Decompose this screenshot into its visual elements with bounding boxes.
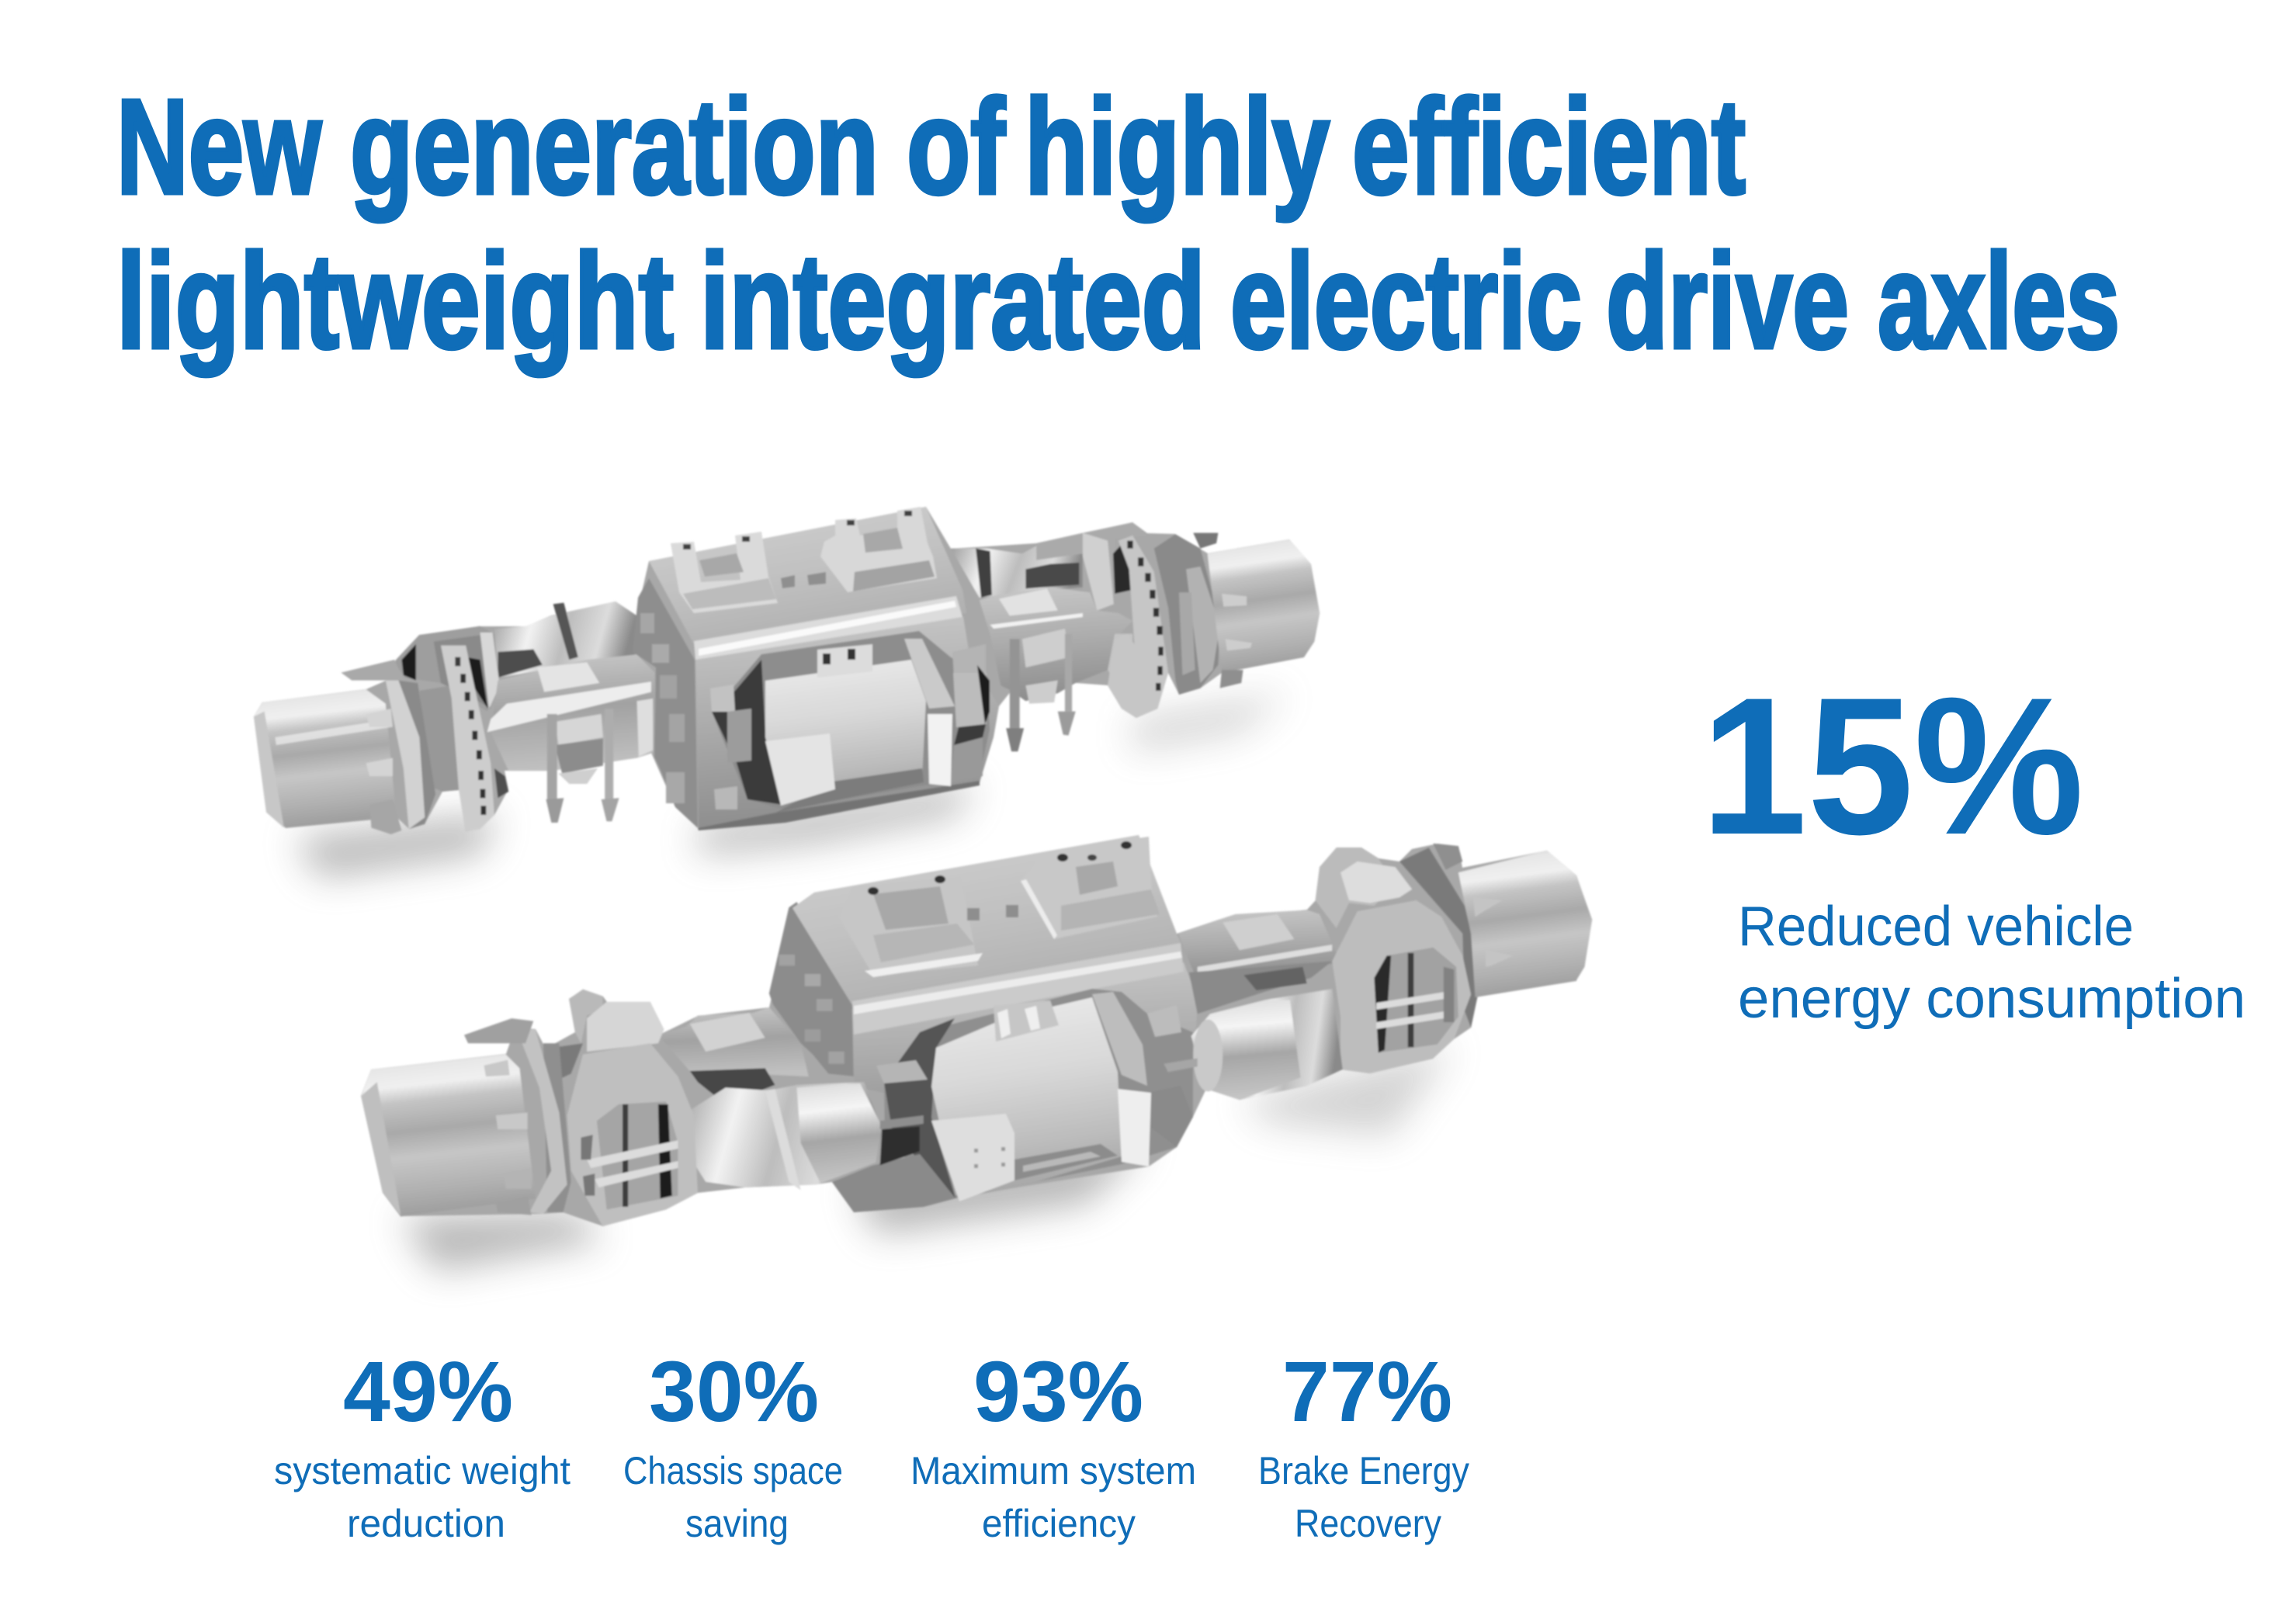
stat: 49% systematic weight reduction: 49%: [343, 1344, 513, 1440]
motor terminal box: [765, 733, 835, 806]
title: efficient: [1352, 71, 1746, 222]
hub cylinder: [254, 689, 397, 828]
mount bracket left: [839, 875, 983, 977]
wheel flange and studs: [464, 1018, 571, 1215]
brake chamber: [1164, 989, 1343, 1100]
axle tube: [658, 1007, 809, 1104]
stat: 30% chassis space saving: saving: [685, 1502, 789, 1545]
motor recess: [876, 989, 1193, 1198]
stat description: energy consumption: [1738, 968, 2246, 1030]
stat: 93% maximum system efficiency: efficiency: [982, 1502, 1136, 1545]
illustration: lower electric drive axle: [361, 835, 1592, 1270]
lower axle gearbox ribs and tube: [658, 902, 856, 1104]
title: New: [116, 71, 321, 222]
stat: 93% maximum system efficiency: Maximum system: [910, 1449, 1196, 1492]
lower axle right wheel end: [1164, 844, 1592, 1100]
caliper arm: [1036, 522, 1147, 611]
electric motor: [698, 639, 980, 830]
U-bolt pins: [1006, 634, 1076, 751]
title: lightweight: [116, 225, 674, 376]
stat: 30% chassis space saving: 30%: [649, 1344, 819, 1440]
axle tube: [1178, 910, 1337, 1014]
title: [116, 71, 2120, 376]
mount bracket right: [781, 507, 937, 592]
stat: 77% brake energy recovery: Brake Energy: [1258, 1449, 1469, 1492]
gearbox ribs: [769, 902, 856, 1076]
stat: 49% systematic weight reduction: reduction: [347, 1502, 505, 1545]
axle tube: [487, 654, 654, 771]
upper brake chamber: [494, 601, 637, 678]
stat: 77% brake energy recovery: [1258, 1344, 1469, 1545]
axle tube: [980, 588, 1132, 704]
joint assembly: [951, 546, 1083, 598]
upper axle gearbox ribs: [633, 578, 698, 828]
upper axle body artwork: [254, 507, 1320, 834]
stat: 93% maximum system efficiency: 93%: [973, 1344, 1143, 1440]
stat: 30% chassis space saving: Chassis space: [623, 1449, 843, 1492]
stat: 93% maximum system efficiency: [910, 1344, 1196, 1545]
motor terminal box: [931, 1114, 1014, 1201]
caliper with disc window: [567, 1043, 698, 1226]
housing bar highlight: [852, 943, 1184, 1035]
motor white plate: [928, 714, 952, 786]
mount bracket left: [671, 532, 778, 613]
upper ear and caliper top: [569, 990, 664, 1052]
stat: 49% systematic weight reduction: systematic weight: [274, 1449, 571, 1492]
hub cylinder: [1458, 851, 1592, 997]
upper axle right wheel end: [951, 522, 1320, 751]
stat: 30% chassis space saving: [623, 1344, 843, 1545]
title: integrated: [700, 225, 1205, 376]
electric motor: [931, 992, 1147, 1195]
title: generation: [350, 71, 879, 222]
stat: 49% systematic weight reduction: [274, 1344, 571, 1545]
wheel flange: [1154, 533, 1220, 695]
wheel flange: [1399, 844, 1482, 1028]
stat: 77% brake energy recovery: 77%: [1282, 1344, 1452, 1440]
title: axles: [1878, 225, 2120, 376]
stat description: [1738, 896, 2246, 1030]
brake disc with vent slots: [441, 646, 494, 831]
motor white plate: [1118, 1089, 1151, 1166]
brake chamber: [682, 1082, 924, 1191]
lower axle left wheel end: [361, 990, 924, 1226]
stat: 77% brake energy recovery: Recovery: [1295, 1502, 1441, 1545]
caliper with disc window: [1332, 900, 1471, 1073]
title: electric: [1230, 225, 1582, 376]
title: highly: [1025, 71, 1330, 222]
upper caliper: [1340, 861, 1412, 903]
motor recess: [710, 631, 990, 809]
mount bracket right: [967, 837, 1160, 939]
housing highlight bar: [694, 596, 962, 660]
upper housing top face: [649, 507, 966, 644]
lower housing front face: [852, 962, 1198, 1149]
upper axle ground shadow: [295, 693, 1289, 877]
title: of: [907, 71, 1006, 222]
lower axle silhouette: [361, 835, 1592, 1226]
illustration: upper electric drive axle: [254, 507, 1320, 877]
caliper arm: [394, 626, 500, 712]
U-bolt pad and pins: [494, 709, 619, 823]
upper housing front face: [695, 617, 999, 828]
lower housing block: [832, 1154, 956, 1212]
brake drum: [419, 685, 471, 792]
lower housing top face: [793, 835, 1181, 1005]
lower axle body artwork: [361, 835, 1592, 1226]
headline stat: 15%: [1701, 657, 2246, 1030]
hub cylinder: [361, 1055, 536, 1216]
brake disc with vent slots: [1108, 536, 1168, 718]
tube behind wheel end: [543, 1043, 583, 1080]
upper axle silhouette: [254, 507, 1320, 831]
back brake disc: [1316, 848, 1396, 928]
title: drive: [1606, 225, 1849, 376]
wheel flange and studs: [341, 660, 435, 834]
stat description: Reduced vehicle: [1738, 896, 2134, 958]
upper axle left wheel end: [254, 601, 654, 834]
hub cylinder: [1208, 539, 1320, 688]
headline stat: 15%: 15%: [1701, 657, 2084, 875]
lower axle ground shadow: [401, 1045, 1454, 1270]
